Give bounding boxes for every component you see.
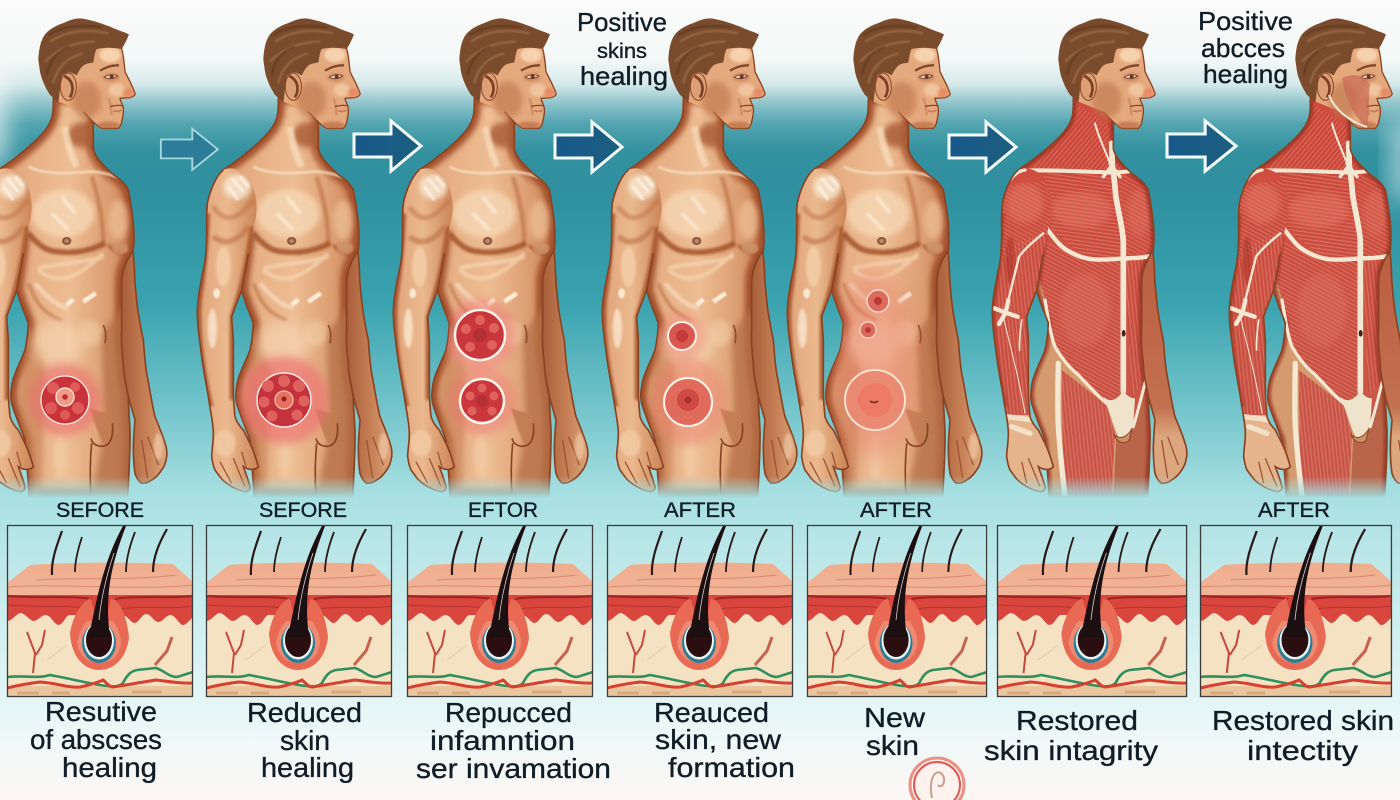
caption 2: skin [280,725,330,756]
caption 3: ser invamation [416,753,611,784]
abscess 5 cluster [833,270,917,460]
abscess 1 [29,364,101,436]
caption 4 [654,697,795,783]
top label: positive abscess healing [1198,6,1293,89]
caption 2: Reduced [247,697,362,728]
skin cross-section panel 7 [1200,525,1392,697]
caption 3: infamntion [430,725,575,756]
skin cross-section panel 1 [7,525,193,697]
caption 5 [864,702,926,761]
caption 1 [30,696,162,783]
caption 4: Reauced [654,697,769,728]
figure 3: two abscesses [393,18,588,497]
figure 5: new skin forming [787,18,982,497]
skin cross-section panel 3 [407,525,593,697]
abscess 3b [448,367,516,435]
top label: positive skins healing: healing [580,61,668,91]
skin cross-section panel 2 [206,525,392,697]
stage labels: EFTOR [468,499,538,522]
figure 6: muscle layer [988,18,1187,498]
caption 5: skin [866,730,919,761]
stage labels: SEFORE [259,499,347,522]
caption 6: skin intagrity [984,735,1158,766]
skin cross-section panel 6 [997,525,1187,697]
arrow 4 [949,122,1016,172]
stage labels: SEFORE [56,499,144,522]
top label: positive skins healing [577,7,668,91]
figures row [0,18,1400,498]
caption 4: formation [668,752,795,783]
skin cross-section panel 5 [807,525,987,697]
arrow 2 [354,121,421,171]
figure 7: muscle layer with face [1225,18,1400,498]
figure 1: abscess before [0,18,167,497]
caption 1: of abscses [30,724,162,755]
figure 2: abscess before larger [197,18,392,497]
arrow 5 [1167,121,1236,171]
caption 1: Resutive [45,696,157,727]
caption 2: healing [261,752,354,783]
caption 4: skin, new [655,724,782,755]
stage labels [56,499,1330,522]
caption 7: Restored skin [1212,705,1394,736]
caption 6: Restored [1016,705,1138,736]
caption 7: intectity [1247,735,1358,766]
figure 4: healing abscesses [602,18,797,497]
caption 1: healing [62,752,157,783]
stage labels: AFTER [664,499,736,522]
caption 3 [416,697,611,784]
caption 6 [984,705,1158,766]
abscess 3a [444,299,516,371]
top label: positive abscess healing: abcces [1201,33,1285,63]
caption 7 [1212,705,1394,766]
facial muscle [1329,75,1370,127]
top label: positive abscess healing: Positive [1198,6,1293,36]
arrow 3 [555,122,622,172]
caption 2 [247,697,362,783]
abscess 4b [650,358,726,446]
abscess 4a [658,312,706,360]
icon: healed wound circle [910,758,964,800]
caption 3: Repucced [445,697,572,728]
stage labels: AFTER [860,499,932,522]
top label: positive skins healing: Positive [577,7,667,37]
stage labels: AFTER [1258,499,1330,522]
arrow 1 (faded) [161,129,218,170]
caption 5: New [864,702,926,733]
skin cross-section panel 4 [607,525,793,697]
top label: positive abscess healing: healing [1203,59,1288,89]
abscess 2 [240,356,328,444]
top label: positive skins healing: skins [597,40,647,63]
